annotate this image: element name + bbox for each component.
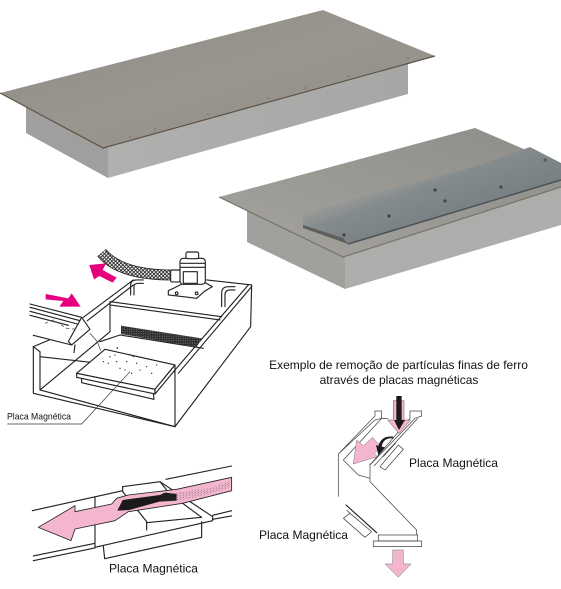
plate housing bbox=[95, 482, 213, 559]
caption: Exemplo de remoção de partículas finas de ferro bbox=[269, 358, 528, 372]
label: upper plate: Placa Magnética bbox=[409, 456, 498, 470]
tank body bbox=[33, 280, 252, 427]
black particle stream bbox=[117, 493, 177, 511]
arrow: deflected pink bbox=[353, 437, 381, 464]
arrow: curved black bbox=[376, 436, 393, 455]
caption bbox=[269, 358, 528, 387]
mesh strip bbox=[121, 326, 202, 347]
magnetic plate bbox=[77, 347, 175, 399]
hose bbox=[98, 249, 172, 280]
chute rails bbox=[32, 466, 232, 561]
arrow: inlet pink bbox=[388, 401, 411, 433]
label: lower plate: Placa Magnética bbox=[259, 528, 348, 542]
diagram: tank with magnetic plate bbox=[7, 249, 252, 427]
diagram: inclined chute with plate bbox=[32, 466, 232, 561]
arrow: inlet black bbox=[394, 396, 405, 430]
arrow: pink outgoing bbox=[89, 263, 117, 283]
label: chute plate: Placa Magnética bbox=[109, 562, 198, 576]
pipes on tank bbox=[131, 280, 235, 307]
pump motor bbox=[168, 252, 212, 298]
label: tank plate: Placa Magnética bbox=[7, 412, 72, 422]
wedge cover bbox=[303, 147, 561, 244]
arrow: pink incoming bbox=[46, 293, 81, 307]
photo: flat magnetic plate bbox=[0, 10, 435, 178]
arrow: outlet pink bbox=[385, 550, 411, 577]
hopper body bbox=[338, 411, 422, 547]
leader line bbox=[7, 372, 130, 424]
chute bbox=[30, 304, 101, 353]
dotted particles bbox=[160, 481, 230, 502]
pink flow arrow bbox=[38, 477, 232, 541]
caption: através de placas magnéticas bbox=[320, 373, 478, 387]
photo: magnetic plate with wedge cover bbox=[219, 128, 561, 289]
diagram: hopper with magnetic plates bbox=[338, 396, 422, 577]
